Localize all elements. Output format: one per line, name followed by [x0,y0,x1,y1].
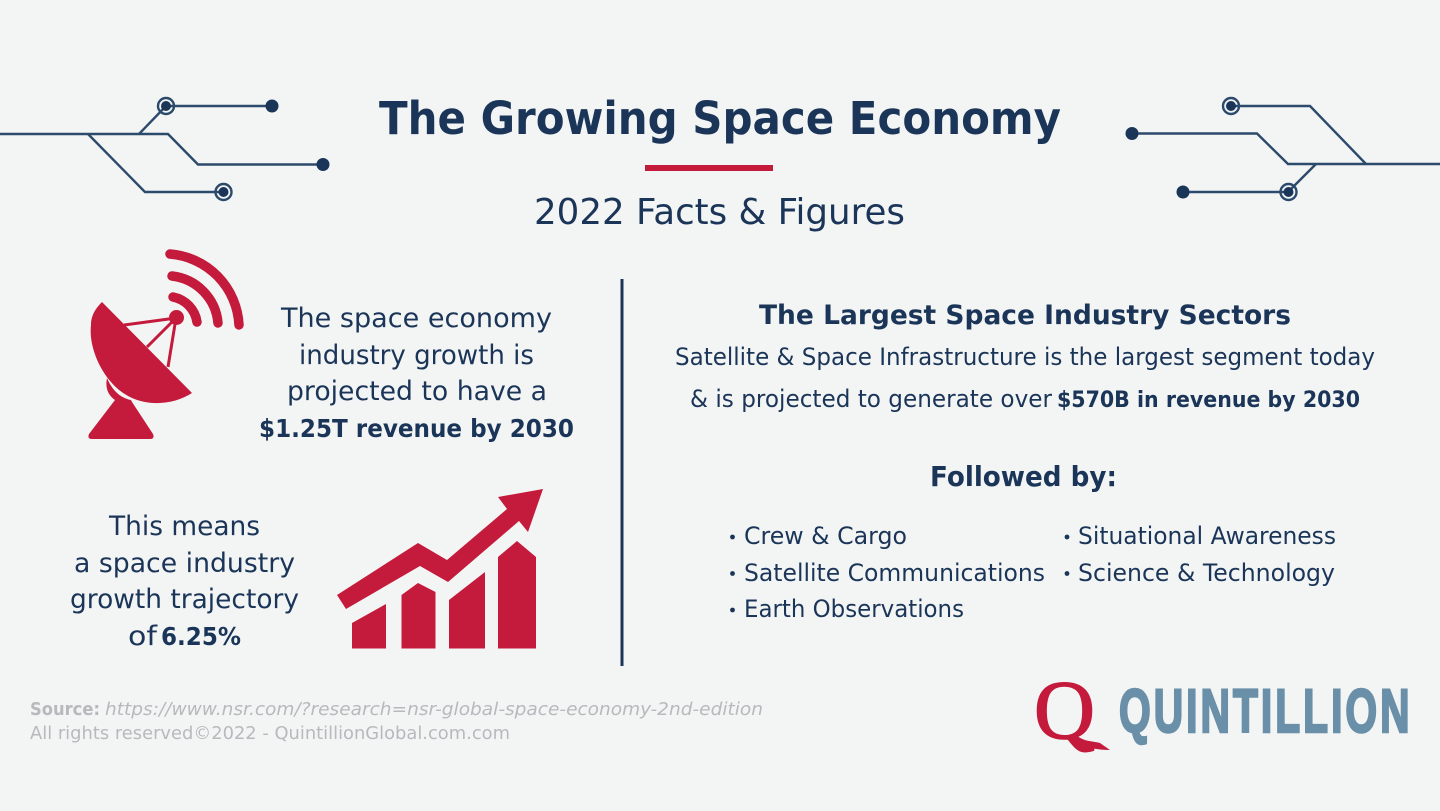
source and copyright: https://www.nsr.com/?research=nsr-global-space-economy-2nd-edition [105,699,763,720]
text: revenue projection: $1.25T revenue by 2030 [259,414,574,443]
icon: satellite dish [88,254,239,439]
text: sectors description [675,343,1375,413]
source and copyright: Source: [30,699,100,720]
text: growth trajectory: 6.25% [161,622,241,651]
circuit decoration: right [1126,98,1440,200]
text: growth trajectory [70,511,299,652]
subtitle: 2022 Facts & Figures [534,192,905,233]
logo: Quintillion [1034,664,1410,757]
text: revenue projection [259,303,574,443]
list: other sectors: Science & Technology [1078,559,1335,587]
logo: Quintillion: Q [1034,664,1095,757]
logo: Quintillion: QUINTILLION [1119,677,1410,745]
text: revenue projection: industry growth is [299,340,534,371]
list: other sectors: Satellite Communications [744,559,1045,587]
list: other sectors: Earth Observations [744,595,964,623]
text: revenue projection: projected to have a [287,376,547,407]
list: other sectors [730,522,1336,623]
list: other sectors: Situational Awareness [1078,522,1336,550]
circuit decoration: left [0,98,330,200]
text: growth trajectory: of [128,621,159,652]
text: sectors description: $570B in revenue by 2030 [1057,388,1360,413]
heading: followed by: Followed by: [930,460,1117,493]
title underline [645,165,773,171]
list: other sectors: Crew & Cargo [744,522,907,550]
text: growth trajectory: a space industry [74,548,295,579]
text: sectors description: Satellite & Space Infrastructure is the largest segment today [675,343,1375,371]
source and copyright: All rights reserved©2022 - QuintillionGlobal.com.com [30,723,510,744]
heading: largest sectors: The Largest Space Industry Sectors [759,300,1291,331]
text: growth trajectory: growth trajectory [70,584,299,615]
text: growth trajectory: This means [108,511,260,542]
title: The Growing Space Economy [379,92,1061,145]
icon: rising bar chart with arrow [337,489,543,648]
text: sectors description: & is projected to generate over [690,385,1052,413]
source and copyright [30,699,763,744]
text: revenue projection: The space economy [280,303,552,334]
vertical divider [620,279,624,666]
